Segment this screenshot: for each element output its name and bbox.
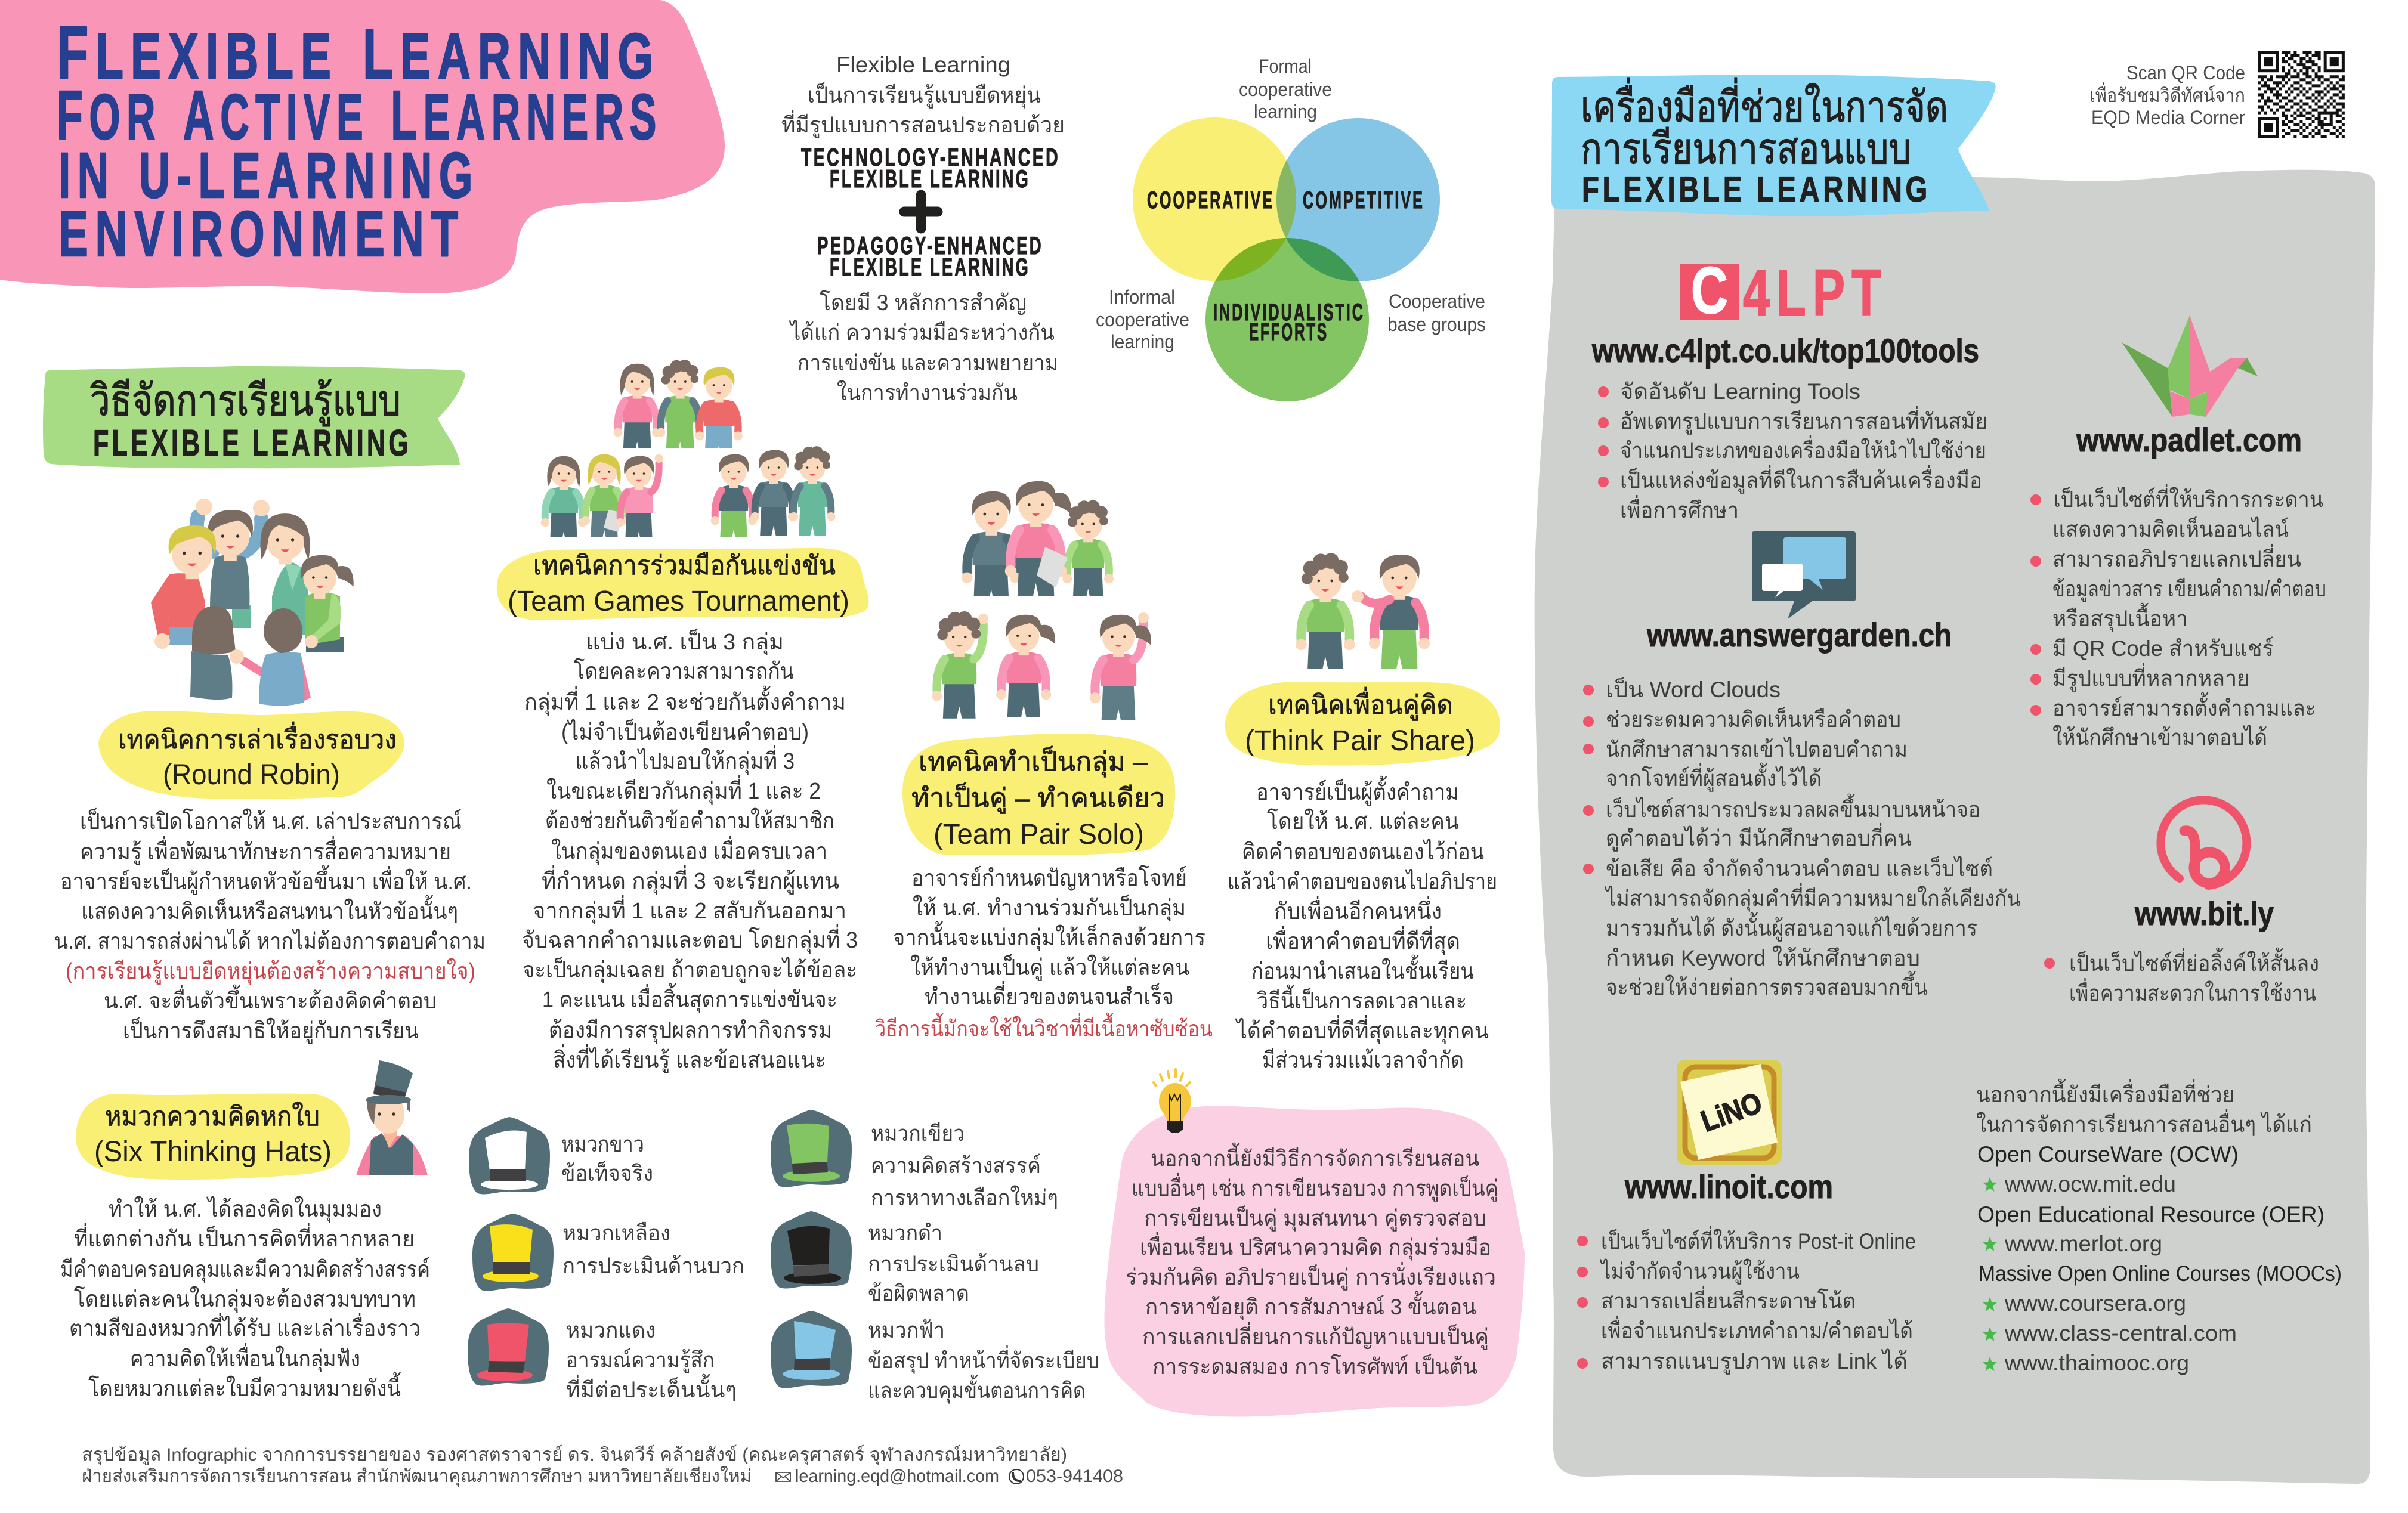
icon: yellow hat (472, 1214, 554, 1291)
text block: team games tournament description: ในกลุ่มของตนเอง เมื่อครบเวลา (551, 836, 827, 865)
panel: other teaching methods callout: เพื่อนเรียน ปริศนาความคิด กลุ่มร่วมมือ (1140, 1232, 1491, 1261)
illustration: round robin group (151, 499, 354, 706)
chart: venn diagram: Cooperative (1389, 290, 1485, 312)
text block: think pair share description: วิธีนี้เป็นการลดเวลาและ (1257, 984, 1467, 1014)
text block: think pair share description: ได้คำตอบที่ดีที่สุดและทุกคน (1235, 1015, 1489, 1044)
list: padlet features: อาจารย์สามารถตั้งคำถามและ (2052, 692, 2316, 720)
text block: round robin description: (การเรียนรู้แบบยืดหยุ่นต้องสร้างความสบายใจ) (66, 958, 475, 985)
text block: think pair share description: กับเพื่อนอีกคนหนึ่ง (1274, 896, 1442, 924)
icon: light bulb (1154, 1069, 1191, 1133)
text block: other tools list: ในการจัดการเรียนการสอนอื่นๆ ได้แก่ (1976, 1109, 2312, 1137)
list: answergarden features: ไม่สามารถจัดกลุ่มคำที่มีความหมายใกล้เคียงกัน (1604, 883, 2021, 912)
icon: qr code (2258, 53, 2345, 137)
text block: flexible learning definition: โดยมี 3 หลักการสำคัญ (820, 290, 1027, 315)
text block: other tools list: www.coursera.org (2004, 1291, 2186, 1316)
text: c4lpt url: www.c4lpt.co.uk/top100tools (1591, 332, 1979, 369)
text block: team games tournament description: ต้องมีการสรุปผลการทำกิจกรรม (549, 1018, 832, 1044)
logo: lino sticky note: LiNO (1696, 1085, 1766, 1138)
list: padlet features: ข้อมูลข่าวสาร เขียนคำถาม/คำตอบ (2052, 577, 2326, 602)
list: answergarden features: เป็น Word Clouds (1606, 676, 1781, 702)
text block: team games tournament description: โดยคละความสามารถกัน (574, 658, 794, 684)
heading: round robin (98, 711, 404, 799)
list: answergarden features: จากโจทย์ที่ผู้สอนตั้งไว้ได้ (1606, 762, 1822, 792)
icon: telephone (1009, 1469, 1024, 1484)
list: bitly features: เป็นเว็บไซต์ที่ย่อลิ้งค์ให้สั้นลง (2069, 947, 2319, 976)
text block: think pair share description: ก่อนมานำเสนอในชั้นเรียน (1251, 954, 1474, 984)
list: padlet features (2030, 484, 2326, 750)
list: answergarden features: จะช่วยให้ง่ายต่อการตรวจสอบมากขึ้น (1606, 971, 1928, 1000)
text block: six thinking hats description: โดยหมวกแต่ละใบมีความหมายดังนี้ (88, 1372, 401, 1401)
text: white hat meaning (561, 1132, 653, 1186)
list: lino features: สามารถเปลี่ยนสีกระดาษโน้ต (1601, 1285, 1856, 1313)
heading: team games tournament (497, 548, 868, 620)
text: black hat meaning (868, 1221, 1039, 1305)
text block: team games tournament description: (ไม่จำเป็นต้องเขียนคำตอบ) (561, 718, 809, 745)
text block: think pair share description: โดยให้ น.ศ. แต่ละคน (1267, 808, 1459, 834)
logo: padlet paper crane (2122, 315, 2258, 417)
icon: blue hat (771, 1311, 852, 1388)
panel: other teaching methods callout: การระดมสมอง การโทรศัพท์ เป็นต้น (1152, 1353, 1477, 1379)
illustration: man with top hat (356, 1060, 428, 1175)
chart: venn diagram: COOPERATIVE (1147, 187, 1274, 214)
panel: other teaching methods callout: การหาข้อยุติ การสัมภาษณ์ 3 ขั้นตอน (1145, 1291, 1476, 1320)
text block: flexible learning definition: เป็นการเรียนรู้แบบยืดหยุ่น (808, 81, 1041, 109)
text block: scan qr code note (2089, 62, 2245, 128)
text: lino url: www.linoit.com (1624, 1168, 1833, 1205)
text: white hat meaning: ข้อเท็จจริง (561, 1159, 653, 1186)
panel: green heading banner: วิธีจัดการเรียนรู้แบบ (90, 377, 401, 426)
chart: venn diagram: learning (1111, 331, 1174, 352)
text: blue hat meaning: หมวกฟ้า (868, 1318, 945, 1342)
text block: team games tournament description: จะเป็นกลุ่มเฉลย ถ้าตอบถูกจะได้ข้อละ (523, 956, 857, 983)
text block: team games tournament description: ที่กำหนด กลุ่มที่ 3 จะเรียกผู้แทน (542, 865, 839, 895)
text block: scan qr code note: เพื่อรับชมวิดีทัศน์จาก (2089, 82, 2245, 106)
text block: other tools list (1976, 1078, 2342, 1375)
text: green hat meaning (871, 1121, 1058, 1210)
heading: six thinking hats: หมวกความคิดหกใบ (105, 1102, 320, 1131)
text block: flexible learning definition: ในการทำงานร่วมกัน (837, 380, 1018, 405)
text block: other tools list: Massive Open Online Courses (MOOCs) (1979, 1261, 2342, 1286)
chart: venn diagram: COMPETITIVE (1303, 187, 1424, 214)
heading: team games tournament: เทคนิคการร่วมมือกันแข่งขัน (533, 551, 836, 580)
list: padlet features: หรือสรุปเนื้อหา (2052, 602, 2188, 632)
text block: flexible learning definition: FLEXIBLE LEARNING (830, 253, 1030, 281)
heading: team pair solo (902, 734, 1175, 855)
text: red hat meaning (566, 1318, 737, 1402)
text: blue hat meaning (868, 1318, 1099, 1404)
text block: six thinking hats description: ตามสีของหมวกที่ได้รับ และเล่าเรื่องราว (69, 1313, 421, 1341)
text: green hat meaning: การหาทางเลือกใหม่ๆ (871, 1185, 1058, 1210)
icon: plus sign (904, 195, 938, 228)
panel: blue heading banner: เครื่องมือที่ช่วยในการจัด (1581, 78, 1948, 131)
text block: footer credits: learning.eqd@hotmail.com (795, 1466, 999, 1486)
text block: team games tournament description: 1 คะแนน เมื่อสิ้นสุดการแข่งขันจะ (542, 983, 837, 1013)
list: answergarden features: ดูคำตอบได้ว่า มีนักศึกษาตอบกี่คน (1606, 822, 1912, 852)
text: red hat meaning: หมวกแดง (566, 1318, 656, 1342)
heading: round robin: เทคนิคการเล่าเรื่องรอบวง (118, 721, 397, 754)
logo: c4lpt (1680, 254, 1888, 330)
text block: team games tournament description: แบ่ง น.ศ. เป็น 3 กลุ่ม (586, 628, 784, 655)
title: ENVIRONMENT (58, 197, 465, 270)
title: FLEXIBLE LEARNING (57, 12, 660, 94)
text block: other tools list: www.class-central.com (2004, 1321, 2237, 1345)
text block: team pair solo description: วิธีการนี้มักจะใช้ในวิชาที่มีเนื้อหาซับซ้อน (875, 1012, 1213, 1042)
chart: venn diagram: Formal (1259, 55, 1312, 77)
text: yellow hat meaning: การประเมินด้านบวก (562, 1254, 744, 1278)
text block: other tools list: www.thaimooc.org (2004, 1351, 2189, 1375)
logo: lino sticky note (1677, 1060, 1782, 1165)
text: white hat meaning: หมวกขาว (561, 1132, 644, 1156)
text block: team games tournament description: จากกลุ่มที่ 1 และ 2 สลับกันออกมา (533, 895, 846, 924)
icon: black hat (771, 1211, 852, 1289)
chart: venn diagram: learning (1254, 101, 1317, 122)
icon: green hat (771, 1110, 852, 1187)
chart: venn diagram: cooperative (1239, 79, 1332, 100)
list: lino features: สามารถแนบรูปภาพ และ Link ได้ (1601, 1348, 1908, 1375)
logo: answergarden speech bubbles (1752, 531, 1856, 619)
list: c4lpt features (1598, 379, 1987, 522)
text block: six thinking hats description: โดยแต่ละคนในกลุ่มจะต้องสวมบทบาท (74, 1286, 416, 1313)
text block: other tools list: Open CourseWare (OCW) (1977, 1142, 2239, 1167)
text block: six thinking hats description: ทำให้ น.ศ. ได้ลองคิดในมุมมอง (109, 1196, 382, 1223)
text block: scan qr code note: Scan QR Code (2126, 62, 2245, 83)
panel: tools grey background (1535, 170, 2375, 1484)
text: yellow hat meaning: หมวกเหลือง (562, 1221, 670, 1245)
panel: green heading banner (43, 366, 465, 468)
text block: round robin description (54, 807, 486, 1044)
list: lino features: เป็นเว็บไซต์ที่ให้บริการ Post-it Online (1601, 1226, 1916, 1254)
text block: think pair share description: แล้วนำคำตอบของตนไปอภิปราย (1228, 869, 1497, 895)
chart: venn diagram (1096, 55, 1486, 401)
heading: team pair solo: (Team Pair Solo) (933, 819, 1144, 850)
list: answergarden features: ช่วยระดมความคิดเห็นหรือคำตอบ (1606, 706, 1901, 732)
text block: flexible learning definition: PEDAGOGY-ENHANCED (817, 231, 1043, 259)
list: padlet features: แสดงความคิดเห็นออนไลน์ (2052, 515, 2289, 542)
panel: blue heading banner: การเรียนการสอนแบบ (1581, 125, 1911, 173)
text: blue hat meaning: ข้อสรุป ทำหน้าที่จัดระเบียบ (868, 1345, 1099, 1374)
text block: team pair solo description: จากนั้นจะแบ่งกลุ่มให้เล็กลงด้วยการ (893, 921, 1205, 951)
text: black hat meaning: หมวกดำ (868, 1221, 942, 1245)
icon: white hat (469, 1117, 550, 1195)
text block: flexible learning definition: FLEXIBLE LEARNING (830, 165, 1030, 193)
list: answergarden features: กำหนด Keyword ให้นักศึกษาตอบ (1606, 945, 1920, 970)
text block: team pair solo description: ให้ทำงานเป็นคู่ แล้วให้แต่ละคน (910, 954, 1189, 981)
text block: six thinking hats description: มีคำตอบครอบคลุมและมีความคิดสร้างสรรค์ (60, 1257, 430, 1283)
list: c4lpt features: จำแนกประเภทของเครื่องมือให้นำไปใช้ง่าย (1620, 435, 1986, 463)
text block: round robin description: อาจารย์จะเป็นผู้กำหนดหัวข้อขึ้นมา เพื่อให้ น.ศ. (60, 865, 472, 895)
list: c4lpt features: เป็นแหล่งข้อมูลที่ดีในการสืบค้นเครื่องมือ (1620, 465, 1982, 494)
icon: envelope (776, 1472, 790, 1481)
panel: blue heading banner (1551, 75, 1996, 216)
text: padlet url: www.padlet.com (2076, 421, 2302, 459)
list: c4lpt features: อัพเดทรูปแบบการเรียนการสอนที่ทันสมัย (1620, 406, 1987, 435)
heading: team pair solo: เทคนิคทำเป็นกลุ่ม – (919, 746, 1148, 778)
text block: team games tournament description: สิ่งที่ได้เรียนรู้ และข้อเสนอแนะ (553, 1044, 826, 1073)
illustration: team games tournament people (541, 360, 835, 542)
list: padlet features: สามารถอภิปรายแลกเปลี่ยน (2052, 543, 2301, 571)
list: lino features: เพื่อจำแนกประเภทคำถาม/คำตอบได้ (1601, 1315, 1913, 1343)
text block: team games tournament description: จับฉลากคำถามและตอบ โดยกลุ่มที่ 3 (522, 924, 858, 954)
list: lino features (1577, 1226, 1916, 1375)
text: blue hat meaning: และควบคุมขั้นตอนการคิด (868, 1374, 1086, 1404)
title: FOR ACTIVE LEARNERS (57, 76, 663, 154)
text block: scan qr code note: EQD Media Corner (2091, 107, 2245, 128)
text block: team games tournament description: ต้องช่วยกันติวข้อคำถามให้สมาชิก (545, 808, 834, 834)
logo: c4lpt: 4LPT (1743, 256, 1888, 330)
panel: other teaching methods callout: ร่วมกันคิด อภิปรายเป็นคู่ การนั่งเรียงแถว (1126, 1261, 1496, 1291)
text block: team pair solo description: ทำงานเดี่ยวของตนจนสำเร็จ (925, 981, 1174, 1010)
panel: other teaching methods callout (1104, 1106, 1525, 1417)
list: answergarden features: มารวมกันได้ ดังนั้นผู้สอนอาจแก้ไขด้วยการ (1606, 912, 1977, 942)
text block: team games tournament description: กลุ่มที่ 1 และ 2 จะช่วยกันตั้งคำถาม (524, 685, 846, 716)
heading: think pair share: เทคนิคเพื่อนคู่คิด (1268, 686, 1453, 721)
text block: think pair share description: มีส่วนร่วมแม้เวลาจำกัด (1262, 1048, 1464, 1073)
text block: other tools list: www.ocw.mit.edu (2004, 1172, 2176, 1196)
text block: six thinking hats description: ที่แตกต่างกัน เป็นการคิดที่หลากหลาย (74, 1223, 415, 1252)
chart: venn diagram: base groups (1387, 314, 1486, 335)
text block: footer credits (82, 1444, 1123, 1487)
list: padlet features: มีรูปแบบที่หลากหลาย (2052, 663, 2249, 692)
text block: think pair share description: คิดคำตอบของตนเองไว้ก่อน (1242, 839, 1484, 865)
text block: flexible learning definition: ได้แก่ ความร่วมมือระหว่างกัน (789, 320, 1055, 345)
list: padlet features: มี QR Code สำหรับแชร์ (2052, 636, 2274, 661)
text block: think pair share description: เพื่อหาคำตอบที่ดีที่สุด (1266, 926, 1460, 955)
text block: footer credits: ฝ่ายส่งเสริมการจัดการเรียนการสอน สำนักพัฒนาคุณภาพการศึกษา มหาวิทยาลัยเชียงใหม่ (82, 1466, 752, 1487)
text: red hat meaning: ที่มีต่อประเด็นนั้นๆ (566, 1373, 737, 1402)
list: answergarden features: ข้อเสีย คือ จำกัดจำนวนคำตอบ และเว็บไซต์ (1606, 855, 1993, 881)
title (57, 12, 663, 270)
text block: round robin description: แสดงความคิดเห็นหรือสนทนาในหัวข้อนั้นๆ (81, 895, 458, 924)
chart: venn diagram: INDIVIDUALISTIC (1213, 299, 1365, 326)
text block: team pair solo description: อาจารย์กำหนดปัญหาหรือโจทย์ (911, 865, 1187, 891)
chart: venn diagram: cooperative (1096, 309, 1189, 330)
text: green hat meaning: ความคิดสร้างสรรค์ (871, 1153, 1041, 1178)
heading: six thinking hats: (Six Thinking Hats) (94, 1136, 332, 1168)
panel: other teaching methods callout: การเขียนเป็นคู่ มุมสนทนา คู่ตรวจสอบ (1144, 1204, 1486, 1232)
text block: round robin description: น.ศ. จะตื่นตัวขึ้นเพราะต้องคิดคำตอบ (104, 984, 437, 1014)
heading: six thinking hats (76, 1094, 350, 1180)
heading: think pair share (1225, 682, 1500, 766)
text block: think pair share description (1228, 775, 1497, 1073)
text block: round robin description: ความรู้ เพื่อพัฒนาทักษะการสื่อความหมาย (80, 836, 451, 865)
text block: team pair solo description: ให้ น.ศ. ทำงานร่วมกันเป็นกลุ่ม (913, 894, 1186, 921)
list: bitly features: เพื่อความสะดวกในการใช้งาน (2069, 977, 2316, 1005)
text block: flexible learning definition (781, 52, 1065, 405)
text block: six thinking hats description (60, 1196, 430, 1401)
illustration: team pair solo people (932, 481, 1151, 722)
heading: think pair share: (Think Pair Share) (1245, 725, 1475, 757)
panel: other teaching methods callout: การแลกเปลี่ยนการแก้ปัญหาแบบเป็นคู่ (1142, 1321, 1489, 1350)
text: black hat meaning: ข้อผิดพลาด (868, 1281, 969, 1305)
text block: flexible learning definition: Flexible Learning (836, 52, 1010, 77)
panel: other teaching methods callout: แบบอื่นๆ เช่น การเขียนรอบวง การพูดเป็นคู่ (1132, 1172, 1498, 1202)
text: red hat meaning: อารมณ์ความรู้สึก (566, 1348, 715, 1373)
panel: blue heading banner: FLEXIBLE LEARNING (1582, 169, 1931, 209)
heading: team games tournament: (Team Games Tournament) (508, 586, 849, 617)
logo: c4lpt: C (1691, 254, 1728, 327)
text block: footer credits: 053-941408 (1026, 1466, 1123, 1486)
list: padlet features: ให้นักศึกษาเข้ามาตอบได้ (2052, 725, 2267, 750)
text: black hat meaning: การประเมินด้านลบ (868, 1252, 1039, 1276)
list: bitly features (2044, 947, 2319, 1005)
text block: round robin description: เป็นการดึงสมาธิให้อยู่กับการเรียน (123, 1017, 419, 1044)
text block: round robin description: เป็นการเปิดโอกาสให้ น.ศ. เล่าประสบการณ์ (80, 807, 462, 834)
text: green hat meaning: หมวกเขียว (871, 1121, 965, 1146)
text block: team games tournament description: แล้วนำไปมอบให้กลุ่มที่ 3 (575, 745, 795, 775)
logo: bitly (2160, 800, 2246, 886)
text block: footer credits: สรุปข้อมูล Infographic จากการบรรยายของ รองศาสตราจารย์ ดร. จินตวีร์ คล้ายสังข์ (คณะครุศาสตร์ จุฬาลงกรณ์มหาวิทยาลัย) (82, 1444, 1067, 1466)
text block: round robin description: น.ศ. สามารถส่งผ่านได้ หากไม่ต้องการตอบคำถาม (54, 929, 486, 954)
text block: team games tournament description: ในขณะเดียวกันกลุ่มที่ 1 และ 2 (546, 775, 821, 805)
chart: venn diagram: Informal (1109, 286, 1175, 308)
text: answergarden url: www.answergarden.ch (1646, 616, 1952, 654)
list: c4lpt features: เพื่อการศึกษา (1620, 494, 1739, 522)
chart: venn diagram: EFFORTS (1249, 319, 1328, 345)
title: IN U-LEARNING (58, 139, 480, 211)
panel: title banner (0, 0, 725, 293)
text block: six thinking hats description: ความคิดให้เพื่อนในกลุ่มฟัง (130, 1343, 360, 1372)
panel: green heading banner: FLEXIBLE LEARNING (93, 423, 412, 464)
list: c4lpt features: จัดอันดับ Learning Tools (1620, 379, 1860, 404)
text: yellow hat meaning (562, 1221, 744, 1278)
list: answergarden features (1583, 676, 2021, 1000)
text block: other tools list: Open Educational Resource (OER) (1977, 1202, 2324, 1227)
text: bitly url: www.bit.ly (2134, 895, 2274, 932)
text block: flexible learning definition: ที่มีรูปแบบการสอนประกอบด้วย (781, 109, 1065, 138)
text block: team games tournament description (522, 628, 858, 1073)
text block: think pair share description: อาจารย์เป็นผู้ตั้งคำถาม (1256, 775, 1459, 806)
panel: other teaching methods callout: นอกจากนี้ยังมีวิธีการจัดการเรียนสอน (1151, 1142, 1479, 1171)
list: lino features: ไม่จำกัดจำนวนผู้ใช้งาน (1599, 1258, 1800, 1285)
text block: flexible learning definition: การแข่งขัน และความพยายาม (797, 351, 1058, 375)
list: answergarden features: เว็บไซต์สามารถประมวลผลขึ้นมาบนหน้าจอ (1606, 793, 1980, 822)
text block: other tools list: www.merlot.org (2004, 1232, 2162, 1256)
list: answergarden features: นักศึกษาสามารถเข้าไปตอบคำถาม (1606, 737, 1908, 762)
illustration: think pair share people (1296, 553, 1430, 669)
heading: team pair solo: ทำเป็นคู่ – ทำคนเดียว (911, 782, 1165, 814)
text block: other tools list: นอกจากนี้ยังมีเครื่องมือที่ช่วย (1976, 1078, 2234, 1107)
heading: round robin: (Round Robin) (163, 759, 340, 791)
list: padlet features: เป็นเว็บไซต์ที่ให้บริการกระดาน (2054, 484, 2323, 512)
text block: flexible learning definition: TECHNOLOGY-ENHANCED (801, 143, 1060, 171)
text block: team pair solo description (875, 865, 1213, 1042)
icon: red hat (468, 1308, 549, 1386)
